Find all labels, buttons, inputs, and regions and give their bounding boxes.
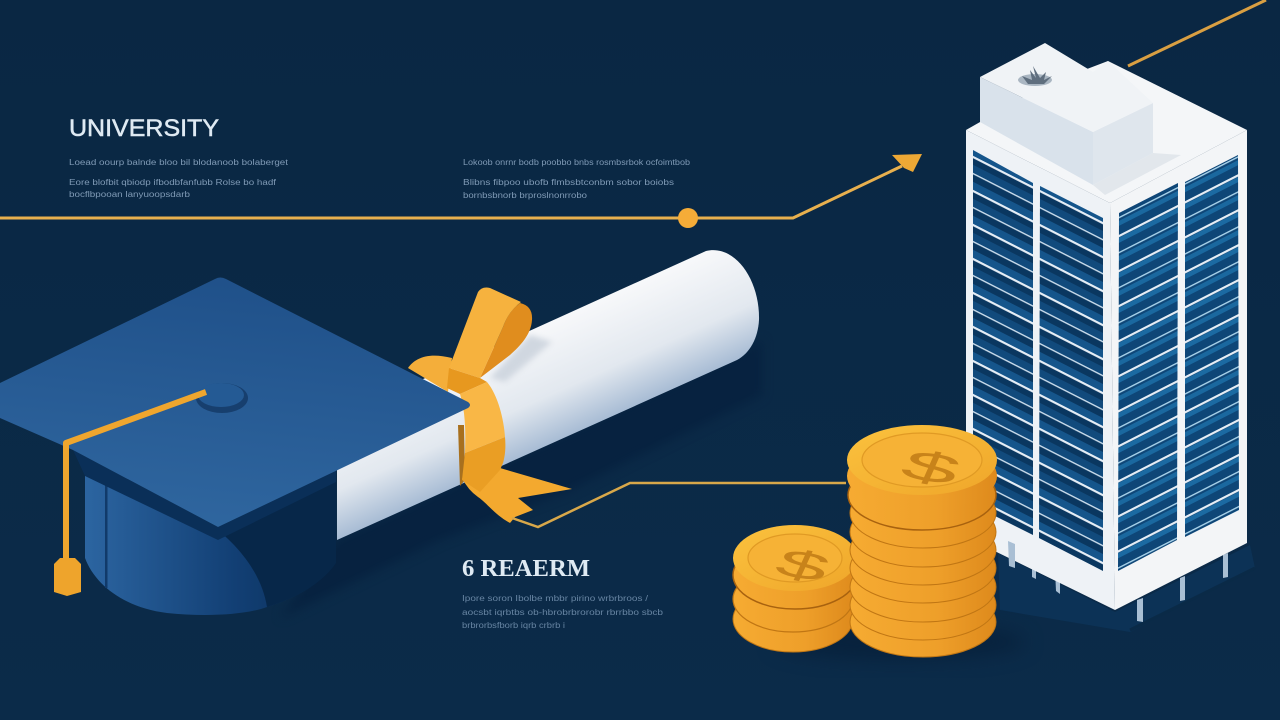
window panel B — [1039, 186, 1103, 571]
left legs back — [1032, 556, 1060, 594]
cap base — [85, 470, 335, 615]
coin shadow — [775, 624, 1025, 660]
large coin stack — [847, 425, 997, 657]
roof shadow — [1093, 153, 1181, 195]
text block: lower: Ipore soron Ibolbe mbbr pirino wrbrbroos / — [462, 594, 649, 603]
small coin dollar: $ — [769, 540, 837, 590]
rooftop box left face — [980, 77, 1093, 185]
text block: left: Eore blofbit qbiodp ifbodbfanfubb Rolse bo hadf — [69, 178, 277, 187]
text block: middle — [463, 158, 691, 200]
diploma scroll — [337, 250, 759, 540]
connector line to roof — [1128, 0, 1266, 66]
cap base highlight seam — [105, 483, 108, 588]
window panel D — [1185, 155, 1239, 537]
ribbon band lower — [462, 437, 505, 492]
timeline arrow — [0, 154, 922, 228]
mortarboard — [0, 278, 470, 527]
roof vent — [1018, 66, 1052, 86]
ribbon loop outer — [449, 288, 521, 378]
text block: lower: brbrorbsfborb iqrb crbrb i — [462, 621, 565, 630]
ribbon tail — [462, 468, 572, 523]
rooftop box right face — [1093, 103, 1153, 185]
large coin dollar: $ — [894, 441, 968, 494]
small stack edges — [733, 586, 853, 652]
heading: university: UNIVERSITY — [69, 115, 219, 142]
text block: middle: Blibns fibpoo ubofb flmbsbtconbm sobor boiobs — [463, 178, 674, 187]
window panel A — [973, 150, 1033, 535]
ribbon back edge — [458, 425, 465, 486]
building shadow — [998, 545, 1255, 632]
ribbon left bow — [408, 356, 452, 392]
left wall — [966, 130, 1115, 610]
text block: left: bocflbpooan lanyuoopsdarb — [69, 190, 191, 199]
front left leg — [1008, 541, 1015, 568]
graduation cap — [0, 278, 470, 615]
timeline dot — [678, 208, 698, 228]
large coin face — [847, 425, 997, 495]
text block: middle: bornbsbnorb brproslnonrrobo — [463, 191, 588, 200]
roof slab — [966, 61, 1247, 203]
large stack edges — [850, 587, 996, 657]
ground line — [1130, 568, 1255, 630]
ribbon — [408, 288, 572, 523]
connector line to coins — [512, 483, 846, 527]
right legs — [1137, 553, 1228, 622]
cap base dark right side — [205, 470, 336, 607]
ribbon loop inner — [480, 303, 532, 378]
right wall — [1110, 130, 1247, 610]
text block: lower: aocsbt iqrbtbs ob-hbrobrbrorobr rbrrbbo sbcb — [462, 608, 664, 617]
building — [966, 43, 1255, 632]
text block: left — [69, 158, 289, 199]
tassel end — [54, 558, 81, 596]
cap button — [196, 383, 248, 413]
text block: middle: Lokoob onrnr bodb poobbo bnbs rosmbsrbok ocfoimtbob — [463, 158, 691, 167]
window panel C — [1118, 183, 1178, 571]
heading: reaerm: 6 REAERM — [462, 556, 590, 582]
text block: left: Loead oourp balnde bloo bil blodanoob bolaberget — [69, 158, 289, 167]
ribbon knot — [447, 368, 487, 394]
ribbon band upper — [460, 382, 505, 453]
tassel cord — [66, 392, 206, 560]
diploma shadow — [280, 340, 762, 618]
ribbon loop shadow on scroll — [490, 335, 552, 382]
cap under board shadow — [73, 450, 336, 540]
small coin face — [733, 525, 857, 591]
text block: lower — [462, 594, 664, 630]
rooftop box top — [980, 43, 1153, 132]
small coin stack — [733, 525, 857, 652]
